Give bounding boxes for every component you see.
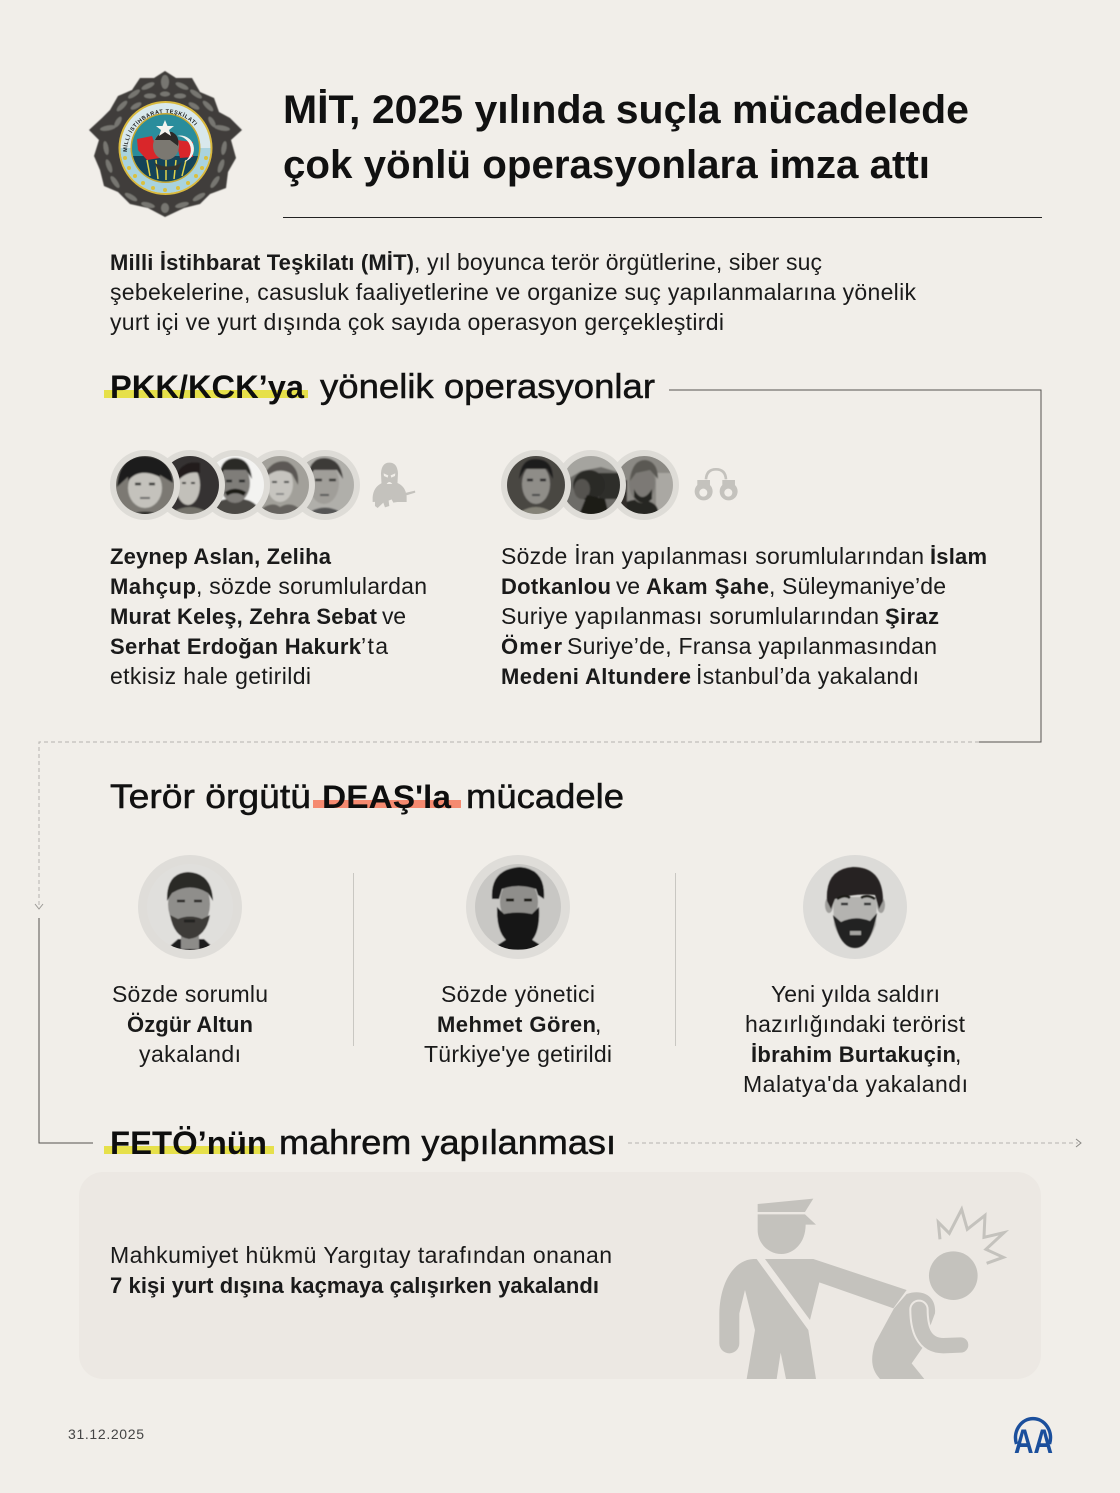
heading: DEAŞ: Terör örgütü bbox=[110, 778, 311, 816]
icon: AA logo: AA bbox=[1014, 1423, 1053, 1461]
caption: Mehmet Gören: Mehmet Gören bbox=[437, 1012, 596, 1037]
text: PKK captured: Medeni Altundere bbox=[501, 664, 691, 689]
emblem medallion bbox=[118, 101, 212, 195]
caption: Özgür Altun: yakalandı bbox=[139, 1041, 241, 1067]
title: çok yönlü operasyonlara imza attı bbox=[283, 143, 930, 187]
text: PKK killed: Murat Keleş, Zehra Sebat bbox=[110, 604, 378, 629]
icon: police arresting suspect bbox=[719, 1199, 1004, 1379]
title bbox=[283, 88, 969, 187]
text: PKK killed: Serhat Erdoğan Hakurk bbox=[110, 634, 362, 659]
caption: İbrahim Burtakuçin bbox=[743, 981, 968, 1097]
connector lines bbox=[35, 390, 1081, 1147]
caption: Özgür Altun: Sözde sorumlu bbox=[112, 981, 268, 1007]
intro text: şebekelerine, casusluk faaliyetlerine ve organize suç yapılanmalarına yönelik bbox=[110, 279, 916, 305]
title: MİT, 2025 yılında suçla mücadelede bbox=[283, 88, 969, 132]
portrait: Medeni Altundere bbox=[618, 450, 679, 520]
intro text: , yıl boyunca terör örgütlerine, siber suç bbox=[414, 249, 822, 275]
caption: İbrahim Burtakuçin: Yeni yılda saldırı bbox=[771, 981, 940, 1007]
text: PKK captured: İslam bbox=[930, 544, 987, 569]
text: PKK captured: Suriye’de, Fransa yapılanmasından bbox=[567, 633, 937, 659]
portrait: Akam Şahe bbox=[564, 450, 626, 520]
caption: İbrahim Burtakuçin: İbrahim Burtakuçin bbox=[751, 1042, 956, 1067]
text: PKK captured: , Süleymaniye’de bbox=[769, 573, 946, 599]
heading: FETÖ: FETÖ’nün bbox=[110, 1125, 267, 1161]
photo group: PKK killed bbox=[110, 450, 360, 520]
caption: Mehmet Gören: Sözde yönetici bbox=[441, 981, 595, 1007]
portrait: Mehmet Gören bbox=[466, 855, 570, 959]
text: PKK killed: etkisiz hale getirildi bbox=[110, 663, 311, 689]
heading: PKK/KCK: PKK/KCK’ya bbox=[110, 369, 304, 405]
text: PKK captured: Şiraz bbox=[885, 604, 939, 629]
caption: İbrahim Burtakuçin: hazırlığındaki terörist bbox=[745, 1011, 966, 1037]
text: PKK killed: Mahçup bbox=[110, 574, 196, 599]
portrait: Zeynep Aslan bbox=[110, 450, 180, 520]
photo group: PKK captured bbox=[501, 450, 679, 520]
caption: Mehmet Gören bbox=[424, 981, 612, 1067]
date: 31.12.2025 bbox=[68, 1426, 144, 1442]
heading: PKK/KCK: yönelik operasyonlar bbox=[320, 368, 655, 406]
portrait: Zehra Sebat bbox=[258, 450, 315, 520]
heading: DEAŞ: mücadele bbox=[466, 778, 624, 816]
text: PKK captured: Akam Şahe bbox=[646, 574, 769, 599]
heading: FETÖ: mahrem yapılanması bbox=[279, 1124, 616, 1162]
caption: İbrahim Burtakuçin: Malatya'da yakalandı bbox=[743, 1071, 968, 1097]
intro text: Milli İstihbarat Teşkilatı (MİT) bbox=[110, 250, 414, 275]
text: PKK captured: Dotkanlou bbox=[501, 574, 611, 599]
panel: FETÖ bbox=[79, 1172, 1041, 1379]
intro text bbox=[110, 249, 916, 335]
emblem wreath bbox=[89, 71, 242, 217]
portrait: Murat Keleş bbox=[212, 450, 270, 520]
text: PKK captured: İstanbul’da yakalandı bbox=[696, 663, 919, 689]
caption: Mehmet Gören: Türkiye'ye getirildi bbox=[424, 1041, 612, 1067]
intro text: yurt içi ve yurt dışında çok sayıda operasyon gerçekleştirdi bbox=[110, 309, 724, 335]
portrait: İbrahim Burtakuçin bbox=[803, 855, 907, 959]
caption: Özgür Altun bbox=[112, 981, 268, 1067]
heading: PKK/KCK bbox=[104, 368, 655, 406]
text: PKK killed bbox=[110, 544, 427, 689]
text: PKK killed: , sözde sorumlulardan bbox=[196, 573, 427, 599]
icon: handcuffs bbox=[695, 469, 738, 500]
panel text bbox=[110, 1242, 612, 1298]
text: PKK captured: Ömer bbox=[501, 634, 562, 659]
text: PKK killed: ’ta bbox=[361, 633, 388, 659]
heading: DEAŞ: DEAŞ'la bbox=[322, 779, 451, 815]
panel text: Mahkumiyet hükmü Yargıtay tarafından onanan bbox=[110, 1242, 612, 1268]
caption: İbrahim Burtakuçin: , bbox=[955, 1041, 961, 1067]
portrait: Zeliha Mahçup bbox=[168, 450, 225, 520]
portrait: Özgür Altun bbox=[138, 855, 242, 959]
icon: masked militant bbox=[373, 463, 415, 508]
caption: Mehmet Gören: , bbox=[595, 1011, 601, 1037]
icon: MİT emblem bbox=[88, 70, 242, 218]
separators bbox=[353, 873, 676, 1046]
text: PKK captured: Sözde İran yapılanması sorumlularından bbox=[501, 543, 924, 569]
heading: FETÖ bbox=[104, 1124, 616, 1162]
panel text: 7 kişi yurt dışına kaçmaya çalışırken yakalandı bbox=[110, 1273, 599, 1298]
emblem ring text: MİLLİ İSTİHBARAT TEŞKİLATI bbox=[122, 109, 198, 152]
text: PKK captured bbox=[501, 543, 987, 689]
text: PKK captured: ve bbox=[616, 573, 640, 599]
caption: Özgür Altun: Özgür Altun bbox=[127, 1012, 253, 1037]
heading: DEAŞ bbox=[110, 778, 624, 816]
portrait: Serhat Erdoğan Hakurk bbox=[302, 450, 360, 520]
text: PKK captured: Suriye yapılanması sorumlularından bbox=[501, 603, 879, 629]
portrait: İslam Dotkanlou bbox=[501, 450, 571, 520]
text: PKK killed: Zeynep Aslan, Zeliha bbox=[110, 544, 332, 569]
text: PKK killed: ve bbox=[382, 603, 406, 629]
